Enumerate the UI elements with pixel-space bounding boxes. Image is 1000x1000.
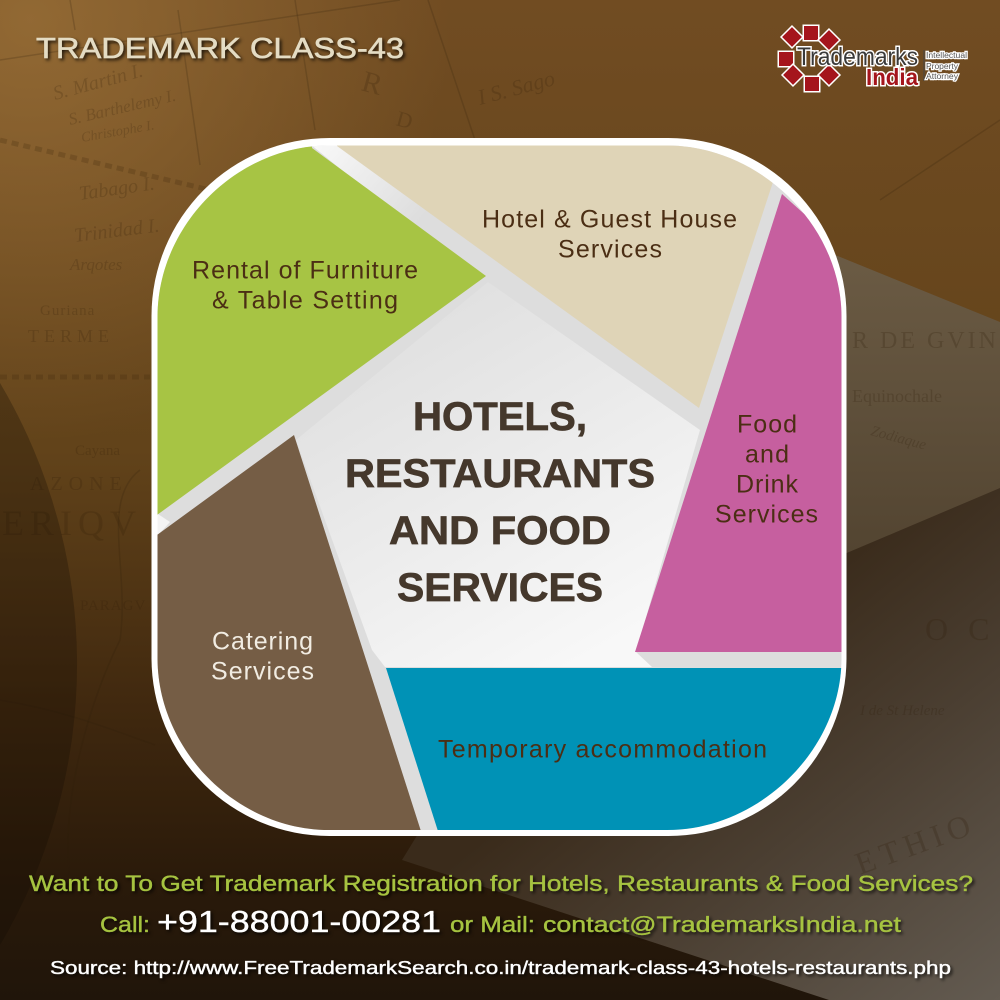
label: Temporary accommodation: Temporary accommodation bbox=[438, 736, 767, 764]
map labels: Cayana bbox=[75, 443, 120, 459]
background: grey upper band right bbox=[700, 200, 1000, 640]
call to action: contact line: +91-88001-00281 bbox=[157, 904, 441, 939]
call to action: headline: Want to To Get Trademark Registration for Hotels, Restaurants & Food Services? bbox=[29, 871, 973, 896]
map labels: AZONE bbox=[30, 473, 128, 495]
label: Rental of Furniture bbox=[192, 257, 418, 315]
map labels: Tabago I. bbox=[78, 173, 156, 205]
map labels: I S. Sago bbox=[474, 65, 557, 110]
source line: Source: http://www.FreeTrademarkSearch.co.in/trademark-class-43-hotels-restaurants.php bbox=[50, 958, 951, 978]
title: TRADEMARK CLASS-43 bbox=[36, 33, 404, 65]
notch highlight bbox=[158, 514, 170, 534]
center heading: RESTAURANTS bbox=[345, 452, 655, 496]
map labels over grey band: Equinochale bbox=[852, 386, 942, 406]
center pentagon bbox=[308, 328, 700, 667]
segment: green bbox=[140, 140, 486, 515]
center heading: HOTELS, bbox=[413, 395, 587, 439]
segment: brown bbox=[158, 435, 420, 830]
diagram panel bbox=[140, 130, 860, 850]
label: Catering Services: Services bbox=[211, 658, 314, 686]
call to action: contact line: or Mail: bbox=[450, 912, 535, 937]
label: Food and Drink bbox=[715, 411, 818, 529]
map labels over grey band: O C bbox=[925, 611, 995, 647]
background: dark left circle bbox=[0, 383, 77, 945]
label: Food and Drink: Drink bbox=[736, 471, 798, 499]
segment: beige bbox=[337, 130, 790, 408]
map labels over grey band: Zodiaque bbox=[869, 423, 928, 454]
label: Food and Drink: Food bbox=[737, 411, 797, 439]
map labels: Guriana bbox=[40, 303, 95, 319]
map labels: Trinidad I. bbox=[73, 215, 161, 247]
map labels over grey band: R DE GVIN bbox=[852, 328, 999, 354]
map labels: TERME bbox=[28, 326, 114, 346]
panel base bbox=[150, 140, 850, 840]
map labels: PARAGV bbox=[80, 598, 146, 614]
map labels over grey band: I de St Helene bbox=[859, 703, 945, 719]
logo tagline: Intellectual bbox=[926, 51, 967, 60]
label: Food and Drink: and bbox=[745, 441, 789, 469]
segment: blue bbox=[386, 668, 842, 830]
center heading bbox=[345, 395, 655, 610]
logo tagline: Property bbox=[926, 62, 958, 71]
logo wordmark: Trademarks bbox=[797, 43, 918, 71]
center heading: SERVICES bbox=[397, 566, 603, 610]
label: Hotel and Guest House bbox=[482, 206, 737, 264]
label: Catering Services: Catering bbox=[212, 628, 313, 656]
map labels: R bbox=[358, 65, 386, 102]
logo tagline bbox=[924, 50, 967, 81]
map labels bbox=[2, 60, 557, 614]
map dashed band bbox=[0, 140, 210, 377]
call to action: contact line: Call: bbox=[100, 912, 150, 937]
call to action: contact line: contact@TrademarksIndia.net bbox=[543, 912, 901, 937]
map labels: S. Martin I. bbox=[51, 60, 145, 105]
map labels: Arqotes bbox=[69, 255, 123, 274]
label: Rental of Furniture: & Table Setting bbox=[212, 287, 398, 315]
map labels: D bbox=[394, 106, 416, 134]
label: Rental of Furniture: Rental of Furniture bbox=[192, 257, 418, 285]
map labels over grey band bbox=[850, 328, 999, 882]
rounded panel white border bbox=[152, 138, 846, 836]
call to action: contact line bbox=[100, 904, 901, 939]
label: Hotel and Guest House: Hotel & Guest House bbox=[482, 206, 737, 234]
logo tagline: Attorney bbox=[926, 72, 958, 81]
segment: pink bbox=[635, 194, 860, 652]
label: Hotel and Guest House: Services bbox=[558, 236, 662, 264]
logo: India bbox=[866, 64, 918, 90]
logo icon: red squares ring bbox=[779, 26, 839, 91]
center heading: AND FOOD bbox=[389, 509, 611, 553]
label: Food and Drink: Services bbox=[715, 501, 818, 529]
map labels over grey band: ETHIO bbox=[850, 805, 981, 882]
logo bbox=[779, 26, 967, 91]
label: Catering Services bbox=[211, 628, 314, 686]
map labels: S. Barthelemy I. bbox=[67, 86, 178, 129]
map labels: Christophe I. bbox=[80, 118, 155, 146]
map labels: ERIQV bbox=[2, 503, 142, 543]
top gap highlight bbox=[313, 146, 395, 202]
background: grey lower band right bbox=[402, 488, 1000, 1000]
